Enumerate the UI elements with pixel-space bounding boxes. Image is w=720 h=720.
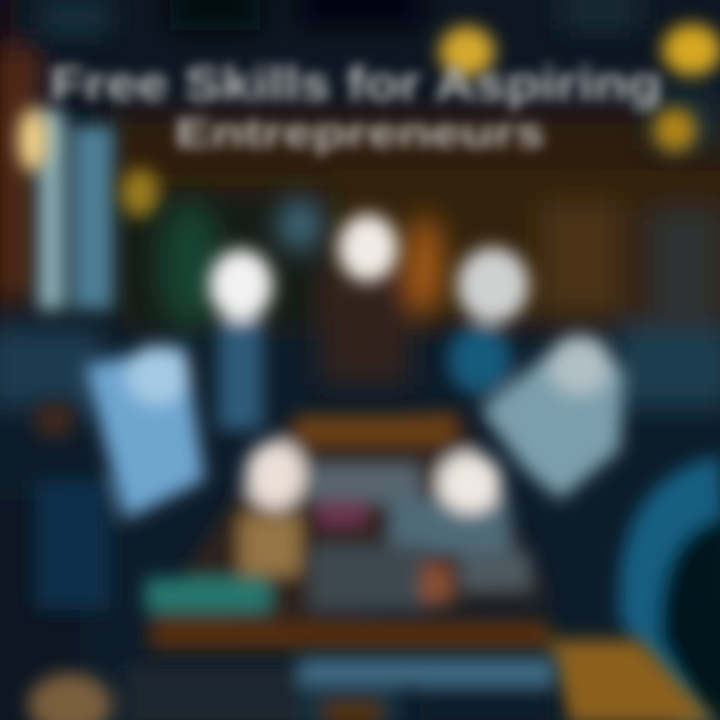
plant: [158, 200, 222, 330]
title line 2: Entrepreneurs: [175, 109, 545, 156]
ceiling shadows: [40, 0, 720, 150]
sofa at right: [619, 455, 720, 720]
title line 1: Free Skills for Aspiring: [50, 58, 662, 111]
window: [38, 110, 114, 310]
table with papers and cups: [145, 410, 720, 720]
title: [50, 58, 662, 156]
hanging lamps: [18, 24, 720, 218]
background figure and warm glow: [278, 199, 443, 385]
foreground: [28, 658, 555, 720]
people: left, centre and right figures: [33, 214, 625, 610]
